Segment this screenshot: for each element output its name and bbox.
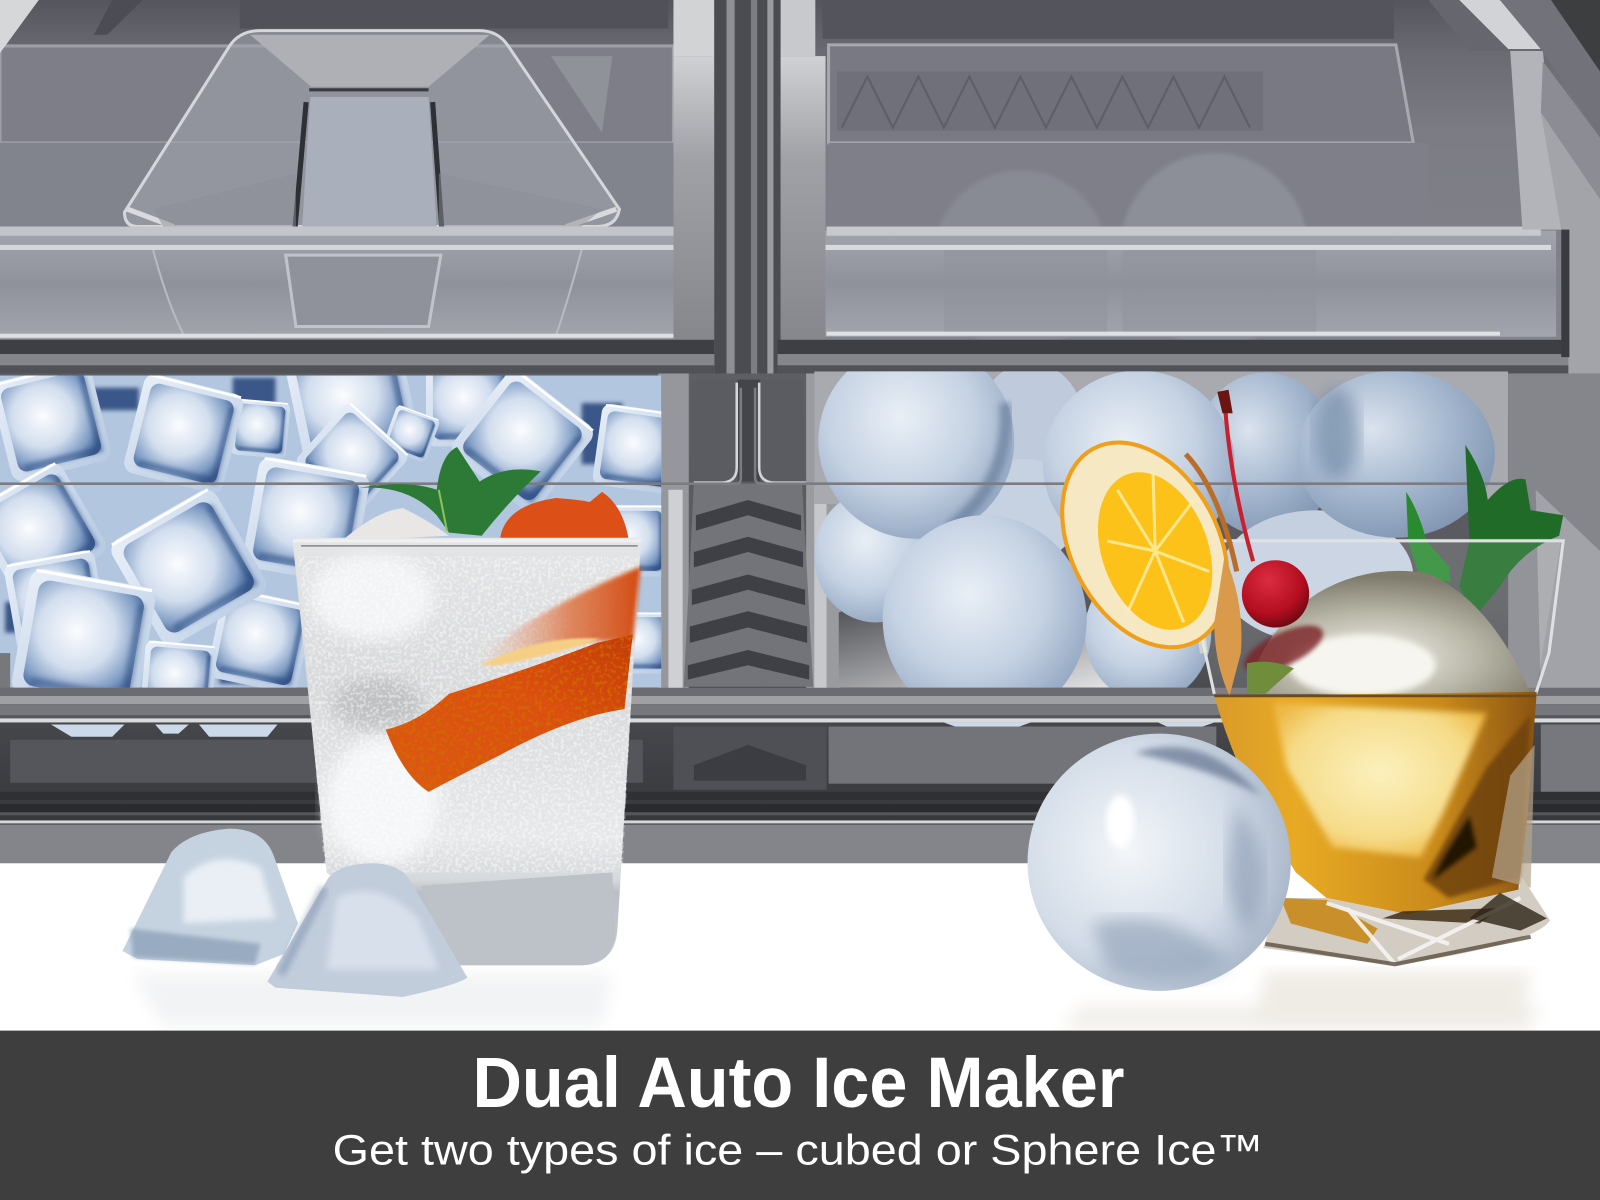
right side rail bbox=[1429, 0, 1600, 378]
panel: sphere ice in right bin bbox=[814, 371, 1508, 688]
herb garnish bbox=[1406, 445, 1563, 617]
glass rim bbox=[293, 539, 641, 542]
right bin back wall bbox=[822, 0, 1429, 230]
lower section background bbox=[0, 373, 1600, 827]
lower shelf rail bbox=[0, 688, 1600, 823]
small cubed ice pieces bbox=[122, 829, 467, 997]
ice piece back bbox=[122, 829, 298, 965]
whisky liquid bbox=[1214, 692, 1537, 914]
left bin front face bbox=[0, 227, 682, 339]
sphere in glass top bbox=[1247, 571, 1531, 694]
ice cubes bbox=[0, 376, 662, 688]
glass body bbox=[293, 538, 641, 965]
panel: cubed ice in left bin bbox=[0, 376, 662, 688]
left bin back wall bbox=[0, 0, 673, 230]
top garnish: orange peel bbox=[500, 492, 629, 539]
large sphere ice bbox=[1028, 734, 1291, 991]
left ice scoop insert bbox=[124, 31, 619, 230]
caption bar bbox=[0, 1031, 1600, 1200]
crystal base bbox=[1263, 878, 1550, 965]
bubbles bbox=[296, 556, 643, 878]
faint spheres behind upper right bin bbox=[933, 153, 1308, 350]
back spheres bbox=[814, 362, 1413, 702]
ice piece front bbox=[267, 863, 467, 997]
floor reflections bbox=[133, 971, 1541, 1030]
center chevron floor bbox=[658, 373, 841, 690]
ice peeking under rail bbox=[51, 722, 1214, 737]
cherry with stem bbox=[1217, 390, 1329, 682]
whisky glass with sphere ice bbox=[1029, 390, 1563, 965]
dark shelf band bbox=[0, 230, 1569, 376]
glass upper wall bbox=[1181, 539, 1561, 694]
top garnish: mint bbox=[359, 447, 541, 536]
orange peel in glass bbox=[378, 566, 643, 801]
subtitle: Get two types of ice – cubed or Sphere Ice™ bbox=[333, 1126, 1263, 1174]
center bin posts bbox=[673, 0, 826, 378]
tall glass with sparkling drink bbox=[293, 447, 643, 965]
dark gaps between cubes bbox=[5, 378, 622, 684]
title: Dual Auto Ice Maker bbox=[472, 1043, 1124, 1123]
floor bbox=[0, 863, 1600, 1031]
front spheres bbox=[818, 343, 1495, 723]
base liquid bbox=[420, 872, 615, 965]
right bin front face bbox=[786, 227, 1556, 337]
refrigerator upper shelf bbox=[0, 0, 1600, 378]
orange slice bbox=[1029, 414, 1261, 696]
transparent shelf fronts bbox=[0, 373, 1600, 700]
large white ice in glass bbox=[311, 554, 434, 640]
